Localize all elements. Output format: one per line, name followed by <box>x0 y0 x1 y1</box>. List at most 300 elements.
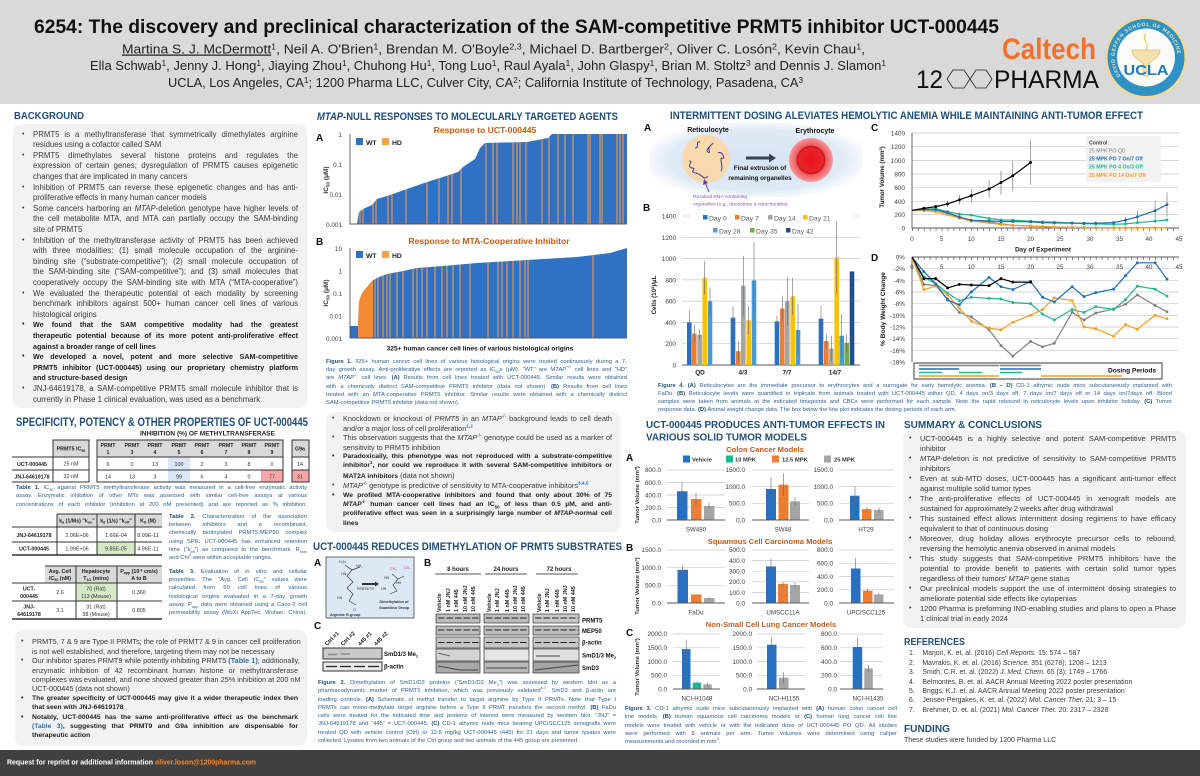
bar chart: NCI-H1048: 2000.0 <box>647 631 667 638</box>
text block: specificity bullets: Our inhibitor spares PRMT9 while potently inhibiting PRMT5 (Table 1); additionally, <box>32 656 300 665</box>
table 1: 4 <box>154 450 157 456</box>
figure 4C: tumor volume line chart: 1000 <box>891 158 905 165</box>
bar chart: HT29: 0.0 <box>824 518 833 524</box>
figure 3B: squamous cell carcinoma model bars: B <box>626 543 633 554</box>
figure 4B: reticulocyte bar chart: B <box>643 203 650 214</box>
caption: figure 1: Figure 1. 325+ human cancer cell lines of various histological origins were treated continuously during a 7- <box>326 359 627 365</box>
figure 3C: lung cancer model bars: Tumor Volume (mm³) <box>634 638 641 696</box>
panel: summary and conclusions <box>903 431 1186 628</box>
authors: 1 <box>162 59 167 68</box>
figure 3C: lung cancer model bars: C <box>626 628 633 639</box>
bar chart: NCI-H1155: 2000.0 <box>732 631 752 638</box>
authors: 1 <box>856 42 862 52</box>
figure 1B chart: response to MTA-cooperative inhibitor: WT <box>366 253 377 260</box>
bar chart: HT29: 1500.0 <box>813 467 833 474</box>
text block: background bullets: the SAM-binding site (“SAM-competitive”); and (3) small molecules that <box>33 267 298 276</box>
figure 2A: methyl transfer schematic: HN <box>337 596 343 600</box>
table 3 <box>12 566 162 619</box>
table 3: 64619178 <box>17 612 41 618</box>
table 3: Avg. Cell <box>49 569 72 575</box>
figure 4D: body weight line chart: 35 <box>1116 264 1123 271</box>
figure 4C: tumor volume line chart: C <box>871 123 878 134</box>
logo: 1200 Pharma <box>916 66 1099 94</box>
text block: summary bullets: 1200 Pharma is preforming IND-enabling studies and plans to open a Phase <box>920 604 1176 613</box>
text block: background bullets <box>22 130 298 404</box>
authors: ; 1200 Pharma LLC, Culver City, CA <box>309 76 514 90</box>
figure 4A: reticulocyte to erythrocyte schematic: A <box>644 123 651 134</box>
bar chart: UMSCC11A: 500.0 <box>729 547 745 554</box>
figure 3A: colon cancer model bars: Colon Cancer Models <box>726 445 804 454</box>
text block: specificity bullets: PRMT5, 7 & 9 are Type II PRMTs; the role of PRMT7 & 9 in cancer cell proliferation <box>32 637 301 646</box>
chart legend: Day 7 <box>741 216 759 222</box>
table 1 <box>12 440 309 482</box>
bar chart: NCI-H1048: 0.0 <box>658 686 667 694</box>
chart legend: 25 MPK PO 4 On/3 Off <box>1089 164 1143 170</box>
table 2: k <box>59 518 62 524</box>
text block: background bullets: histological origins <box>33 310 97 319</box>
figure 2B: western blots over time: 2 <box>614 655 617 660</box>
table 3: Hepatocyte <box>82 569 110 575</box>
figure 4B: reticulocyte bar chart: Cells (10 <box>651 289 658 314</box>
heading: summary: SUMMARY & CONCLUSIONS <box>904 419 1042 431</box>
figure 1A chart: response to UCT-000445: WT <box>366 140 377 147</box>
caption: figure 4: samples were taken from animals at the indicated timepoints and CBCs were performed for each sample. Note the rapid rebound in reticulocyte levels upon inhibitor holiday. (C) Tumor <box>658 399 1172 405</box>
figure 2B: western blots over time: 1 nM JNJ <box>446 588 452 612</box>
figure 2B: western blots over time: 10 nM 445 <box>521 586 527 612</box>
figure 3C: lung cancer model bars: Non-Small Cell Lung Cancer Models <box>706 620 836 629</box>
caption: table 1: assay. Enzymatic inhibition of other MTs was assessed with similar cell-free assays at various <box>16 493 307 499</box>
bar chart: SW480: 0.0 <box>652 518 661 524</box>
authors: 1 <box>881 59 887 68</box>
table 3: 31 (Rat) <box>86 604 106 610</box>
figure 2B: western blots over time: 1 nM JNJ <box>495 588 501 612</box>
figure 4D: body weight line chart: D <box>871 253 878 264</box>
table 3: IC <box>49 576 54 582</box>
figure 1B chart: response to MTA-cooperative inhibitor: B <box>316 237 323 248</box>
heading: intermittent dosing: INTERMITTENT DOSING ALEVIATES HEMOLYTIC ANEMIA WHILE MAINTAINING ANTI-TUMOR EFFECT <box>670 110 1143 122</box>
table 1: 25 nM <box>64 462 79 468</box>
text block: specificity bullets: complexes was evaluated, and none showed greater than 25% inhibition at 200 nM <box>32 675 301 684</box>
heading: funding: FUNDING <box>904 723 950 735</box>
header band <box>0 0 1200 104</box>
table 1: 32 nM <box>64 474 79 480</box>
bar chart: NCI-H1435: NCI-H1435 <box>853 696 884 702</box>
figure 4D: body weight line chart: 5 <box>940 264 944 271</box>
table 1: 9 <box>271 450 274 456</box>
bar chart: SW48: 500.0 <box>729 500 745 508</box>
table 2: off <box>125 520 130 524</box>
caption: figure 4 <box>658 383 1172 413</box>
funding statement: These studies were funded by 1200 Pharma LLC <box>904 736 1056 744</box>
caption: figure 4: Figure 4. (A) Reticulocytes are the immediate precursor to erythrocytes and a surrogate for early hemolytic anemia. (B – D) CD-1 athymic nude mice subcutaneously implanted with <box>658 383 1172 389</box>
text block: background bullets: Inhibition of the methyltransferase activity of PRMT5 has been achieved <box>33 236 298 245</box>
bar chart: NCI-H1435: 800.0 <box>821 631 837 638</box>
caption: figure 1: with a chemically distinct SAM-competitive PRMT5 inhibitor (data not shown). (B) Results from cell lines <box>326 384 627 390</box>
caption: table 1 <box>16 485 307 508</box>
figure 1B chart: response to MTA-cooperative inhibitor: 50 <box>326 294 330 300</box>
caption: figure 1: SAM-competitive PRMT5 inhibitor (data not shown). <box>326 400 459 406</box>
table 3: cm/s) <box>142 569 158 575</box>
figure 3A: colon cancer model bars: A <box>626 453 633 464</box>
table 2: K <box>140 518 144 524</box>
chart legend: Day 35 <box>756 228 778 236</box>
figure 1B chart: response to MTA-cooperative inhibitor: 0.01 <box>330 314 342 320</box>
table 1: 3 <box>154 474 156 480</box>
panel: MTAP bullets <box>326 412 620 532</box>
figure 2B: western blots over time: Vehicle <box>537 593 543 612</box>
figure 1A chart: response to UCT-000445: 0.01 <box>330 192 342 199</box>
figure 1B chart: response to MTA-cooperative inhibitor: 325+ human cancer cell lines of various histological origins <box>387 346 574 352</box>
text block: background bullets: PRMT5 is a methyltransferase that symmetrically dimethylates arginine <box>33 130 298 139</box>
table 3: 113 (Mouse) <box>81 594 111 600</box>
footer band: oliver.loson@1200pharma.com <box>155 760 256 766</box>
figure 2A: methyl transfer schematic: Dimethylation of <box>380 600 409 604</box>
authors: 3 <box>798 76 804 85</box>
figure 2B: western blots over time: Vehicle <box>487 593 493 612</box>
bar chart: UMSCC11A <box>729 547 809 616</box>
bar chart: FaDu: FaDu <box>688 610 704 616</box>
figure 2A: methyl transfer schematic: HN <box>384 576 390 580</box>
logo: UCLA medical school seal <box>1105 16 1187 98</box>
table 1: G9a <box>295 446 305 452</box>
text block: background bullets: binding site (“substrate-competitive”); (2) small molecule occupation of <box>33 257 298 266</box>
caption: figure 2: treated QD with vehicle control (Ctrl) or 12.5 mg/kg UCT-000445 (445) for 21 days and tumor lysates were <box>318 730 616 736</box>
bar chart: NCI-H1435: 400.0 <box>821 659 837 666</box>
text block: MTAP bullets: and/or a major loss of cell proliferation1,2 <box>343 424 473 433</box>
figure 4A: reticulocyte to erythrocyte schematic: Final extrusion of <box>734 165 787 172</box>
bar chart: SW480: 600.0 <box>645 480 661 487</box>
table 1: 8 <box>248 462 250 468</box>
table 2: 2.06E+06 <box>65 533 89 539</box>
figure 4C: tumor volume line chart: 800 <box>894 172 905 178</box>
bar chart: NCI-H1435: 0.0 <box>828 686 837 694</box>
caption: table 3: permeability assay (WuXi AppTec, Wuhan, China). <box>169 610 307 616</box>
figure 4B: reticulocyte bar chart: 0 <box>672 362 676 370</box>
chart legend: 25 MPK PO 14 On/7 Off <box>1089 173 1146 179</box>
bar chart: UMSCC11A: 0.0 <box>736 600 745 608</box>
dosing periods box: Dosing Periods <box>1108 368 1156 374</box>
figure 2A: methyl transfer schematic: Arginine R-group <box>330 613 361 617</box>
caption: figure 1: day growth assay. Anti-proliferative effects are reported as IC50s (µM). “WT” are MTAP+/+ cell lines and “HD” <box>326 365 627 374</box>
caption: figure 2: JNJ-64619178 and “445” = UCT-000445. (C) CD-1 athymic nude mice bearing UPCISCC125 xenografts were <box>318 721 616 727</box>
figure 4D: body weight line chart: 0 <box>910 264 914 271</box>
figure 4C: tumor volume line chart: 35 <box>1116 236 1123 243</box>
table 3: P <box>120 569 124 575</box>
authors: 1 <box>271 42 277 52</box>
bar chart: NCI-H1048: 1500.0 <box>647 645 667 652</box>
figure 4D: body weight line chart: 15 <box>998 264 1005 271</box>
text block: MTAP bullets: Paradoxically, this phenotype was not reproduced with a substrate-competitive <box>343 453 612 460</box>
bar chart: UPCISCC125: 600.0 <box>817 560 833 568</box>
authors: , Brian M. Stoltz <box>654 59 746 73</box>
bar chart: UMSCC11A: 200.0 <box>729 579 745 586</box>
table 2: JNJ-64619178 <box>16 533 52 539</box>
table 1: 1 <box>107 450 110 456</box>
figure 2A: methyl transfer schematic: NH <box>396 581 402 585</box>
caption: table 2: using SPR. UCT-000445 has enhanced retention <box>169 539 307 545</box>
heading: anti-tumor effects: UCT-000445 PRODUCES ANTI-TUMOR EFFECTS IN <box>646 419 885 431</box>
figure 4C: tumor volume line chart: 10 <box>968 236 975 243</box>
figure 1A chart: response to UCT-000445: 1 <box>338 132 342 139</box>
text block: summary bullets: equivalent to that of continuous dosing <box>920 524 1048 533</box>
figure 4C: tumor volume line chart: 20 <box>1027 236 1035 243</box>
figure 2B: western blots over time: 8 hours <box>447 567 469 573</box>
figure 4A: reticulocyte to erythrocyte schematic <box>644 123 862 208</box>
table 2: on <box>88 520 92 524</box>
figure 4B: reticulocyte bar chart: 600 <box>665 298 676 306</box>
figure 4D: body weight line chart: -4% <box>894 278 905 285</box>
text block: summary bullets: This study suggests that SAM-competitive PRMT5 inhibitors have the <box>920 554 1176 563</box>
bar chart: NCI-H1435 <box>821 631 884 702</box>
figure 2C: tumor lysate western blots: 445 #2 <box>373 631 390 647</box>
text block: summary bullets: reversing the hemolytic anemia observed in animal models <box>920 544 1115 553</box>
title: 6254: The discovery and preclinical characterization of the SAM-competitive PRMT5 inhibitor UCT-000445 <box>34 17 999 38</box>
figure 1B chart: response to MTA-cooperative inhibitor: 0.001 <box>326 336 342 343</box>
caption: figure 2: cells were treated for the indicated time and proteins of interest were measured by western blot. “JNJ” = <box>318 713 616 719</box>
bar chart: SW480 <box>645 467 725 534</box>
figure 2C: tumor lysate western blots: C <box>314 621 321 632</box>
bar chart: UPCISCC125: 400.0 <box>817 574 833 581</box>
bar chart: SW48 <box>725 467 809 534</box>
figure 1A chart: response to UCT-000445: A <box>316 133 323 144</box>
text block: summary bullets: ameliorate potential side effects like cytopenias <box>920 594 1077 603</box>
figure 1B chart: response to MTA-cooperative inhibitor: IC <box>323 300 330 307</box>
text block: MTAP bullets: Knockdown or knockout of PRMT5 in an MTAP-/- background leads to cell death <box>343 414 612 423</box>
chart legend: 12.5 MPK <box>782 458 809 464</box>
table 3: 2.6 <box>56 590 64 596</box>
chart legend <box>683 456 856 464</box>
table 1: PRMT <box>264 443 280 449</box>
authors: 1 <box>304 76 309 85</box>
figure 1A chart: response to UCT-000445: 0.001 <box>326 222 342 229</box>
logo: 1200 Pharma: PHARMA <box>994 66 1099 94</box>
references list: 1. Marjon, K. et. al. (2016) Cell Reports. 15: 574 – 587 <box>909 650 1080 657</box>
table 3: 1/2 <box>86 578 91 582</box>
caption: figure 1: treated with an MTA-cooperative PRMT5 inhibitor. Similar results were obtained with a chemically distinct <box>326 392 627 398</box>
table 1: PRMT <box>218 443 234 449</box>
figure 4D: body weight line chart: -2% <box>894 266 905 273</box>
bar chart: NCI-H1048: NCI-H1048 <box>682 696 713 702</box>
figure 1B chart: response to MTA-cooperative inhibitor: 10 <box>335 246 342 253</box>
bar chart: HT29: 500.0 <box>817 500 833 508</box>
text block: summary bullets: MTAP-deletion is not predictive of sensitivity to SAM-competitive PRMT5 <box>920 454 1176 463</box>
references list: 4. Belmontes, B. et. al. AACR Annual Meeting 2022 poster presentation <box>909 679 1132 686</box>
figure 2B: western blots over time: 1 nM 445 <box>454 589 460 612</box>
text block: background bullets: cooperatively occupy the SAM-binding site with MTA (“MTA-cooperative”) <box>33 278 298 287</box>
figure 2A: methyl transfer schematic: H₂N <box>339 560 346 564</box>
figure 1A chart: response to UCT-000445: (µM) <box>323 166 330 182</box>
figure 2B: western blots over time: MEP50 <box>582 629 602 635</box>
bar chart: NCI-H1048 <box>647 631 720 702</box>
chart legend: Vehicle <box>692 458 713 464</box>
table 2: UCT-000445 <box>19 546 49 552</box>
authors: , Kevin Chau <box>777 42 856 56</box>
text block: specificity bullets: is not well established, and therefore, targeting them may not be necessary <box>32 647 275 656</box>
bar chart: FaDu: 500.0 <box>645 582 661 590</box>
table 2: 1.99E+06 <box>65 546 89 552</box>
figure 4A: reticulocyte to erythrocyte schematic: Reticulocyte <box>687 127 729 134</box>
panel: background <box>13 124 307 408</box>
authors: , John Glaspy <box>570 59 650 73</box>
figure 1A chart: response to UCT-000445: Response to UCT-000445 <box>434 125 537 135</box>
bar chart: UPCISCC125: 800.0 <box>817 547 833 554</box>
table 1: 0 <box>248 474 250 480</box>
bar chart: NCI-H1155: NCI-H1155 <box>769 696 800 702</box>
figure 2A: methyl transfer schematic: PRMT5/7/9 <box>357 587 374 591</box>
caption: table 3: properties. The “Avg. Cell IC50” values were <box>169 577 307 584</box>
authors: , Jenny J. Hong <box>166 59 256 73</box>
text block: MTAP bullets: lines <box>343 520 358 527</box>
authors: 2 <box>664 42 670 52</box>
figure 4C: tumor volume line chart: ) <box>879 146 886 148</box>
authors: 2 <box>772 42 778 52</box>
figure 4C: tumor volume line chart: Day of Experiment <box>1015 246 1072 254</box>
caption: table 3: calculated from 50 cell lines of various <box>169 585 307 591</box>
figure 4B: reticulocyte bar chart: 400 <box>665 320 676 327</box>
heading: dimethylation: UCT-000445 REDUCES DIMETHYLATION OF PRMT5 SUBSTRATES <box>313 541 622 553</box>
figure 4B: reticulocyte bar chart: 1400 <box>662 214 676 220</box>
table 1: 6 <box>201 450 204 456</box>
text block: background bullets: against a broader range of cell lines <box>33 342 156 351</box>
text block: background bullets: residues using a cofactor called SAM <box>33 140 161 149</box>
bar chart: UMSCC11A: UMSCC11A <box>766 610 800 616</box>
table 2: 8.09E-11 <box>137 533 159 539</box>
text block: summary bullets: sustained for approximately 2 weeks after drug withdrawal <box>920 504 1113 513</box>
bar chart: SW48: 1500.0 <box>725 467 745 474</box>
bar chart: UMSCC11A: 400.0 <box>729 558 745 565</box>
bar chart: NCI-H1435: 600.0 <box>821 645 837 652</box>
table 1: 4 <box>224 474 228 480</box>
text block: summary bullets: Moreover, drug holiday allows erythrocyte precursor cells to rebound, <box>920 534 1176 543</box>
bar chart: NCI-H1155: 1500.0 <box>732 645 752 652</box>
figure 4C: tumor volume line chart: 0 <box>910 236 914 243</box>
figure 4D: body weight line chart: 40 <box>1146 264 1153 271</box>
chart legend: 10 MPK <box>735 458 757 464</box>
table 1: PRMT <box>241 443 257 449</box>
text block: specificity bullets: (Table 3), suggesting that PRMT9 and G9a inhibition are dispensable for <box>32 723 298 730</box>
figure 4B: reticulocyte bar chart: 200 <box>665 341 676 348</box>
authors: , Tong Luo <box>431 59 492 73</box>
figure 1A chart: response to UCT-000445 <box>316 125 627 229</box>
figure 3B: squamous cell carcinoma model bars: Squamous Cell Carcinoma Models <box>708 537 832 546</box>
figure 2A: methyl transfer schematic: CH₃ <box>390 567 397 571</box>
caption: table 1: Table 1. IC50 against PRMT5 methyltransferase activity was measured in a cell-free enzymatic activity <box>16 485 307 492</box>
caption: figure 2: Figure 2. Dimethylation of SmD1/D3 proteins (“SmD1/D3 Me2”) was assessed by western blot as a <box>318 680 616 687</box>
text block: background bullets: We found that the SAM competitive modality had the greatest <box>33 320 298 329</box>
references list: 6. Jensen-Pergakes, K. et. al. (2022) Mol. Cancer Ther. 21: 3 – 15 <box>909 697 1116 704</box>
figure 2B: western blots over time: Vehicle <box>437 593 443 612</box>
text block: background bullets: therapeutic potential because of its more potent anti-proliferative effect <box>33 331 298 340</box>
table 2 <box>12 514 162 555</box>
caption: figure 2: collected. Lysates from two animals of the Ctrl group and two animals of the 445 group are presented. <box>318 738 579 744</box>
caption: table 2 <box>169 514 307 561</box>
authors: , Neil A. O'Brien <box>276 42 373 56</box>
table 1: 13 <box>152 462 158 468</box>
authors: Martina S. J. McDermott <box>122 42 272 56</box>
table 1: PRMT <box>171 443 187 449</box>
table 1: JNJ-64619178 <box>14 474 50 480</box>
figure 2B: western blots over time: 1 nM 445 <box>555 589 561 612</box>
text block: specificity bullets: that seen with JNJ-64619178 <box>32 704 124 711</box>
figure 4D: body weight line chart: 20 <box>1027 264 1035 271</box>
text block: summary bullets: regardless of their tumors’ MTAP gene status <box>920 574 1070 583</box>
table 3: 70 (Rat) <box>86 586 106 592</box>
figure 1B chart: response to MTA-cooperative inhibitor: 1 <box>338 268 342 276</box>
table 2: " <box>92 518 95 524</box>
figure 4D: body weight line chart: -12% <box>890 324 905 332</box>
bar chart: NCI-H1155: 0.0 <box>743 686 752 694</box>
figure 4D: body weight line chart <box>871 253 1183 379</box>
figure 4C: tumor volume line chart: 0 <box>901 226 905 232</box>
figure 2A: methyl transfer schematic: HN <box>381 587 387 591</box>
figure 4B: reticulocyte bar chart: QD <box>695 370 705 376</box>
text block: specificity bullets: UCT-000445 (data not shown) <box>32 684 130 693</box>
text block: summary bullets: UCT-000445 is a highly selective and potent SAM-competitive PRMT5 <box>920 434 1176 443</box>
figure 2A: methyl transfer schematic: Guanidino Group <box>379 606 410 610</box>
heading: references: REFERENCES <box>904 636 965 648</box>
figure 2B: western blots over time <box>424 558 617 673</box>
table 3: 0.805 <box>132 608 146 614</box>
table 1: 3 <box>224 462 228 468</box>
figure 3C: lung cancer model bars <box>626 620 884 702</box>
references list: 2. Mavrakis, K. et. al. (2016) Science. 351 (6278): 1208 – 1213 <box>909 660 1107 667</box>
authors: , Brendan M. O'Boyle <box>378 42 509 56</box>
figure 4A: reticulocyte to erythrocyte schematic: organelles (e.g., ribosomes & mitochondria) <box>693 202 788 208</box>
bar chart: FaDu: 1000.0 <box>641 565 661 572</box>
table 1: 14 <box>105 474 111 480</box>
caption: figure 4: FaDu. (B) Reticulocyte levels were quantified in triplicate from animals treated with UCT-000445 either QD, 4 days on/3 days off, 7 days on/7 days off or 14 days on/7days off. Blood <box>658 391 1172 397</box>
figure 4C: tumor volume line chart: 600 <box>894 185 905 192</box>
figure 4C: tumor volume line chart: 45 <box>1176 236 1183 243</box>
bar chart: UPCISCC125 <box>817 547 894 616</box>
figure 4B: reticulocyte bar chart: 800 <box>665 278 676 284</box>
heading: specificity: SPECIFICITY, POTENCY & OTHER PROPERTIES OF UCT-000445 <box>16 417 308 429</box>
figure 2A: methyl transfer schematic: A <box>314 558 321 569</box>
figure 1B chart: response to MTA-cooperative inhibitor: 0.1 <box>333 291 342 298</box>
figure 1A chart: response to UCT-000445: IC <box>323 187 330 194</box>
figure 4B: reticulocyte bar chart: 1000 <box>662 256 676 263</box>
authors <box>90 42 887 90</box>
authors: , Michael D. Bartberger <box>522 42 664 56</box>
figure 4B: reticulocyte bar chart: 7/7 <box>783 370 792 376</box>
bar chart: UPCISCC125: UPCISCC125 <box>847 610 886 616</box>
figure 1B chart: response to MTA-cooperative inhibitor: HD <box>392 253 402 260</box>
table 1: PRMT <box>194 443 210 449</box>
heading: anti-tumor effects <box>646 419 885 444</box>
bar chart: NCI-H1155: 500.0 <box>736 672 752 680</box>
chart legend <box>1086 136 1161 182</box>
text block: background bullets: Inhibition of PRMT5 can reverse these epigenetic changes and has anti- <box>33 183 298 192</box>
figure 2B: western blots over time: 1 nM 445 <box>505 589 511 612</box>
bar chart: SW48: 0.0 <box>736 518 745 524</box>
caption: table 2: between inhibitors and a recombinant, <box>169 522 307 528</box>
caption: figure 3: Figure 3. CD-1 athymic nude mice subcutaneously implanted with (A) human colon cancer cell <box>625 706 897 712</box>
table 2: (1/Ms) "k <box>64 518 88 524</box>
figure 4D: body weight line chart: -18% <box>890 360 905 366</box>
table 3: (mins) <box>91 576 109 582</box>
text block: specificity bullets <box>21 637 301 739</box>
table 1: 14 <box>297 462 303 468</box>
figure 4D: body weight line chart: 25 <box>1057 264 1064 271</box>
figure 2B: western blots over time: β-actin <box>582 640 602 646</box>
bar chart: SW480: 200.0 <box>645 505 661 512</box>
text block: background bullets: with three modalities: (1) small molecule occupation of the arginine- <box>33 246 298 255</box>
bar chart: NCI-H1048: 500.0 <box>651 672 667 680</box>
text block: background bullets: changes that are implicated in many cancers <box>33 172 187 181</box>
table 1: 0 <box>270 462 274 468</box>
table 2: d <box>103 520 105 524</box>
logo: UCLA medical school seal: UCLA <box>1124 62 1169 79</box>
